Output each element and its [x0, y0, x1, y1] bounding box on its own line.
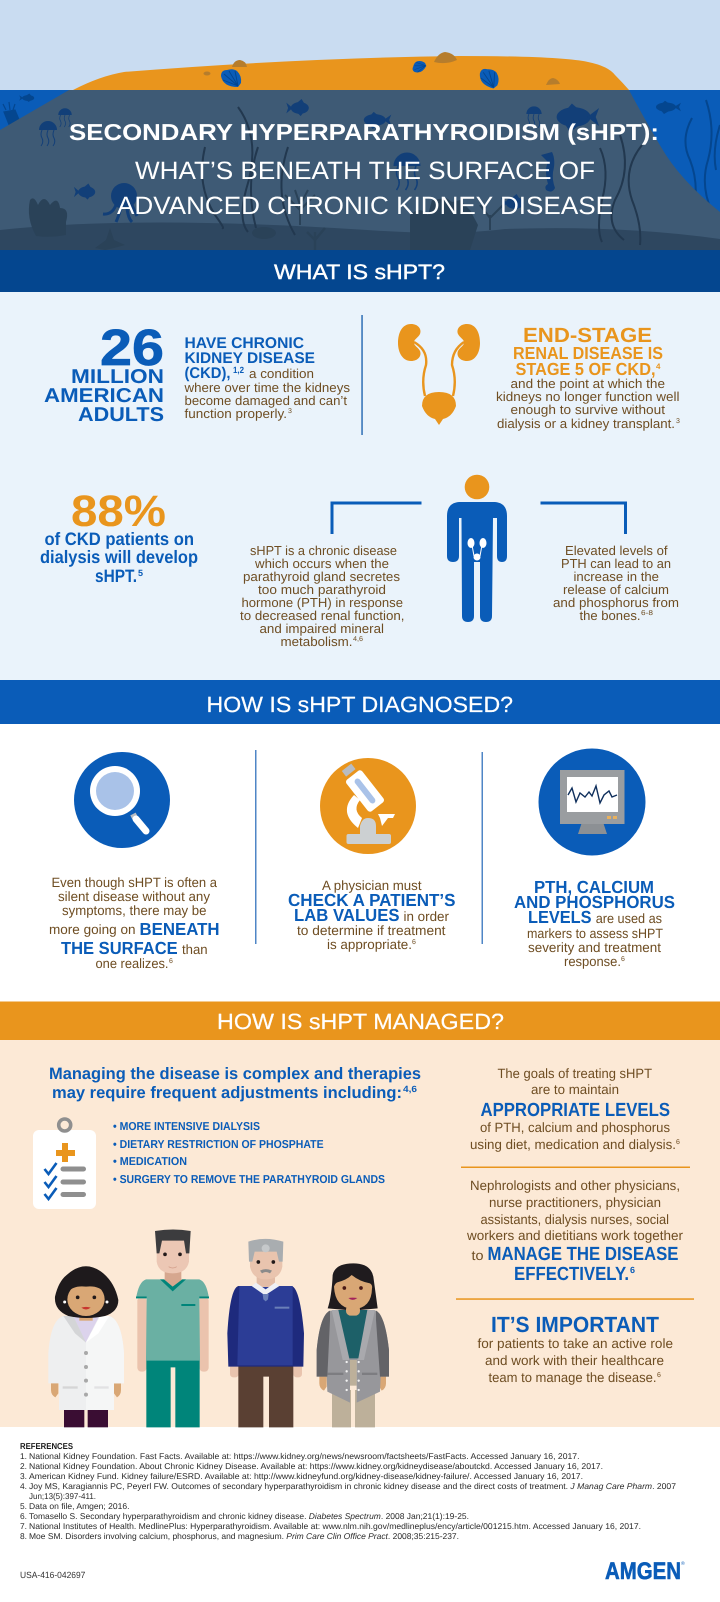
person: patient woman [317, 1263, 389, 1427]
seaweed [202, 107, 642, 245]
seahorse [541, 152, 555, 192]
text: chronic kidney disease: (CKD), [184, 365, 230, 382]
text: check lab values: A physician must [322, 878, 422, 893]
stat: 88 percent: 5 [138, 568, 143, 578]
list: therapies [113, 1121, 385, 1186]
text: sHPT definition: to decreased renal function, [240, 608, 404, 623]
references: 8. [20, 1531, 27, 1541]
text: chronic kidney disease: KIDNEY DISEASE [184, 350, 315, 367]
section band: what is sHPT [0, 250, 720, 292]
text: beneath the surface: THE SURFACE [61, 938, 178, 958]
text: chronic kidney disease: function properly. [184, 406, 287, 421]
text: end-stage renal disease: 4 [656, 362, 661, 371]
text: chronic kidney disease: become damaged and can’t [184, 393, 347, 408]
text: PTH calcium phosphorus: markers to assess sHPT [527, 926, 663, 941]
text: elevated PTH: and phosphorus from [553, 595, 679, 610]
text: PTH calcium phosphorus: response. [564, 954, 621, 969]
header illustration [0, 0, 720, 250]
text: beneath the surface: more going on [49, 922, 136, 937]
island [73, 56, 629, 90]
sea floor [0, 222, 720, 250]
text: chronic kidney disease: where over time the kidneys [183, 380, 351, 395]
text: goals of treating sHPT: using diet, medication and dialysis. [470, 1137, 676, 1152]
text: PTH calcium phosphorus: are used as [596, 911, 662, 926]
references: 2. [20, 1461, 27, 1471]
divider [255, 750, 256, 944]
references: 4. [20, 1481, 27, 1491]
text: beneath the surface: 6 [169, 958, 173, 965]
text: it's important: and work with their healthcare [485, 1353, 664, 1368]
stat: 26 million [44, 319, 164, 426]
heading: managing the disease: may require frequent adjustments including: [52, 1084, 402, 1102]
text: care team: assistants, dialysis nurses, social [480, 1212, 669, 1227]
text: PTH calcium phosphorus: AND PHOSPHORUS [514, 892, 675, 912]
references: 3. [20, 1471, 27, 1481]
text: beneath the surface: one realizes. [96, 956, 168, 971]
references: 1. [20, 1451, 27, 1461]
logo: Amgen: ® [681, 1561, 685, 1567]
text: sHPT definition [240, 543, 404, 649]
references: Data on file, Amgen; 2016. [29, 1501, 130, 1511]
text: sHPT definition: which occurs when the [254, 556, 389, 571]
text: care team: 6 [630, 1265, 635, 1275]
references: American Kidney Fund. Kidney failure/ESRD. Available at: http://www.kidneyfund.org/kidney-disease/kidney-failure/. Accessed January 16, 2017. [29, 1471, 583, 1481]
text: elevated PTH: PTH can lead to an [561, 556, 671, 571]
text: PTH calcium phosphorus [514, 877, 675, 969]
text: check lab values: CHECK A PATIENT’S [288, 890, 456, 910]
text: end-stage renal disease: kidneys no longer function well [496, 389, 680, 404]
text: care team: to [472, 1248, 484, 1263]
octopus [103, 183, 137, 222]
text: care team: nurse practitioners, physician [489, 1195, 661, 1210]
divider [482, 752, 483, 944]
text: goals of treating sHPT: of PTH, calcium and phosphorus [480, 1120, 670, 1135]
text: sHPT definition: parathyroid gland secretes [243, 569, 401, 584]
text: goals of treating sHPT: APPROPRIATE LEVELS [480, 1100, 670, 1121]
stat: 88 percent: of CKD patients on [44, 529, 194, 549]
text: care team: workers and dietitians work together [466, 1228, 684, 1243]
text: elevated PTH: Elevated levels of [565, 543, 668, 558]
stat: 88 percent: sHPT. [95, 566, 137, 586]
text: chronic kidney disease: 3 [288, 408, 292, 415]
text: elevated PTH [553, 543, 679, 623]
icon: magnifying glass [74, 752, 170, 848]
text: PTH calcium phosphorus: 6 [621, 956, 625, 963]
person: male nurse [136, 1229, 209, 1427]
icon: clipboard [33, 1119, 96, 1209]
text: it's important: team to manage the disease. [488, 1370, 656, 1385]
text: end-stage renal disease: END-STAGE [523, 324, 652, 347]
section band: managed: HOW IS sHPT MANAGED? [217, 1009, 504, 1034]
section band: managed [0, 1002, 720, 1040]
text: beneath the surface: BENEATH [140, 919, 220, 939]
text: end-stage renal disease: RENAL DISEASE IS [513, 343, 663, 363]
text: end-stage renal disease: 3 [676, 418, 680, 425]
text: end-stage renal disease [496, 324, 680, 431]
title: SECONDARY HYPERPARATHYROIDISM (sHPT): [69, 119, 659, 145]
text: sHPT definition: metabolism. [280, 634, 352, 649]
text: care team: Nephrologists and other physicians, [470, 1178, 680, 1193]
text: check lab values: in order [404, 909, 449, 924]
small kidneys in figure [468, 538, 486, 560]
text: elevated PTH: the bones. [580, 608, 640, 623]
stat: 88 percent: dialysis will develop [40, 547, 198, 567]
stat: 26 million: ADULTS [78, 404, 164, 426]
list: therapies: • SURGERY TO REMOVE THE PARATHYROID GLANDS [113, 1174, 385, 1186]
panel: how is sHPT diagnosed [0, 724, 720, 1002]
rocks on island [204, 52, 560, 85]
text: check lab values: 6 [412, 939, 416, 946]
text: beneath the surface: than [182, 942, 208, 957]
references: 6. [20, 1511, 27, 1521]
stat: 88 percent: 88% [71, 487, 166, 536]
text: beneath the surface: silent disease without any [58, 889, 210, 904]
text: goals of treating sHPT [470, 1066, 680, 1152]
text: chronic kidney disease: HAVE CHRONIC [184, 335, 304, 352]
text: goals of treating sHPT: are to maintain [531, 1082, 619, 1097]
dark sea floor overlay [0, 90, 720, 250]
divider [361, 315, 363, 435]
title: WHAT’S BENEATH THE SURFACE OF [135, 157, 595, 185]
text: PTH calcium phosphorus: PTH, CALCIUM [534, 877, 654, 897]
references: National Kidney Foundation. Fast Facts. Available at: https://www.kidney.org/news/newsroom/factsheets/FastFacts. Accessed January 16, 2017. [29, 1451, 580, 1461]
text: it's important: for patients to take an active role [478, 1336, 673, 1351]
icon: monitor [538, 748, 646, 856]
title: ADVANCED CHRONIC KIDNEY DISEASE [117, 192, 613, 220]
text: end-stage renal disease: dialysis or a kidney transplant. [497, 416, 675, 431]
seaweed on water [685, 100, 720, 212]
text: end-stage renal disease: enough to survive without [510, 402, 665, 417]
references: Tomasello S. Secondary hyperparathyroidism and chronic kidney disease. Diabetes Spectrum. 2008 Jan;21(1):19-25. [29, 1511, 469, 1521]
heading: managing the disease: 4,6 [403, 1084, 417, 1094]
text: care team [466, 1178, 684, 1285]
text: care team: MANAGE THE DISEASE [488, 1244, 678, 1265]
text: care team: EFFECTIVELY. [514, 1264, 629, 1285]
text: PTH calcium phosphorus: LEVELS [528, 907, 592, 927]
text: sHPT definition: sHPT is a chronic disease [250, 543, 397, 558]
icon: kidneys and bladder [398, 324, 480, 425]
text: sHPT definition: too much parathyroid [258, 582, 386, 597]
text: elevated PTH: release of calcium [563, 582, 669, 597]
stat: 26 million: AMERICAN [44, 385, 164, 407]
text: check lab values: is appropriate. [327, 937, 412, 952]
coral [29, 190, 503, 250]
references: REFERENCES [20, 1441, 73, 1451]
references: 7. [20, 1521, 27, 1531]
stat: 26 million: 26 [100, 319, 164, 376]
panel: how is sHPT managed [0, 1040, 720, 1427]
creatures above water [3, 94, 681, 127]
right bracket [540, 503, 626, 534]
references: Moe SM. Disorders involving calcium, phosphorus, and magnesium. Prim Care Clin Office Pract. 2008;35:215-237. [29, 1531, 459, 1541]
text: end-stage renal disease: and the point at which the [510, 376, 665, 391]
text: it's important: 6 [657, 1372, 661, 1379]
heading: managing the disease [49, 1065, 421, 1102]
text: chronic kidney disease: a condition [249, 366, 314, 381]
panel: what is sHPT [0, 292, 720, 680]
text: chronic kidney disease: 1,2 [233, 365, 244, 375]
text: sHPT definition: and impaired mineral [260, 621, 384, 636]
section band: what is sHPT: WHAT IS sHPT? [274, 261, 445, 284]
list: therapies: • MORE INTENSIVE DIALYSIS [113, 1121, 260, 1133]
references: 5. [20, 1501, 27, 1511]
text: beneath the surface: Even though sHPT is often a [52, 875, 217, 890]
text: sHPT definition: 4,6 [353, 636, 363, 643]
text: it's important [478, 1312, 673, 1385]
icon: microscope [320, 758, 416, 854]
text: elevated PTH: 6-8 [641, 610, 653, 617]
left bracket [332, 503, 422, 534]
text: beneath the surface [49, 875, 220, 971]
text: it's important: IT’S IMPORTANT [491, 1312, 660, 1337]
section band: diagnosed [0, 680, 720, 724]
person: doctor [48, 1266, 124, 1427]
text: PTH calcium phosphorus: severity and treatment [528, 940, 661, 955]
person: older man [227, 1239, 304, 1427]
document code: USA-416-042697 [20, 1570, 85, 1580]
text: beneath the surface: symptoms, there may be [62, 903, 206, 918]
text: elevated PTH: increase in the [574, 569, 659, 584]
text: check lab values: to determine if treatment [297, 923, 446, 938]
heading: managing the disease: Managing the disease is complex and therapies [49, 1065, 421, 1083]
text: sHPT definition: hormone (PTH) in response [242, 595, 403, 610]
shells on island [221, 58, 501, 89]
references: National Kidney Foundation. About Chronic Kidney Disease. Available at: https://www.kidney.org/kidneydisease/aboutckd. Accessed January 16, 2017. [29, 1461, 603, 1471]
references: National Institutes of Health. MedlinePlus: Hyperparathyroidism. Available at: www.nlm.nih.gov/medlineplus/ency/article/001215.htm. Accessed January 16, 2017. [29, 1521, 641, 1531]
text: check lab values: LAB VALUES [294, 905, 400, 925]
list: therapies: • DIETARY RESTRICTION OF PHOSPHATE [113, 1139, 324, 1151]
references: Joy MS, Karagiannis PC, Peyerl FW. Outcomes of secondary hyperparathyroidism in chronic kidney disease and the direct costs of treatment. J Manag Care Pharm. 2007 [29, 1481, 676, 1491]
section band: diagnosed: HOW IS sHPT DIAGNOSED? [206, 692, 513, 717]
stat: 88 percent [40, 487, 198, 586]
references: Jun;13(5):397-411. [29, 1491, 96, 1501]
stat: 26 million: MILLION [71, 366, 164, 388]
text: chronic kidney disease [183, 335, 351, 421]
list: therapies: • MEDICATION [113, 1156, 187, 1168]
sea creatures [39, 99, 599, 222]
text: end-stage renal disease: STAGE 5 OF CKD, [516, 359, 656, 379]
text: goals of treating sHPT: 6 [676, 1139, 680, 1146]
text: goals of treating sHPT: The goals of treating sHPT [498, 1066, 652, 1081]
logo: Amgen: AMGEN [605, 1558, 681, 1585]
title [69, 119, 659, 220]
text: check lab values [288, 878, 456, 952]
references [20, 1441, 676, 1541]
icon: human figure [447, 475, 507, 622]
